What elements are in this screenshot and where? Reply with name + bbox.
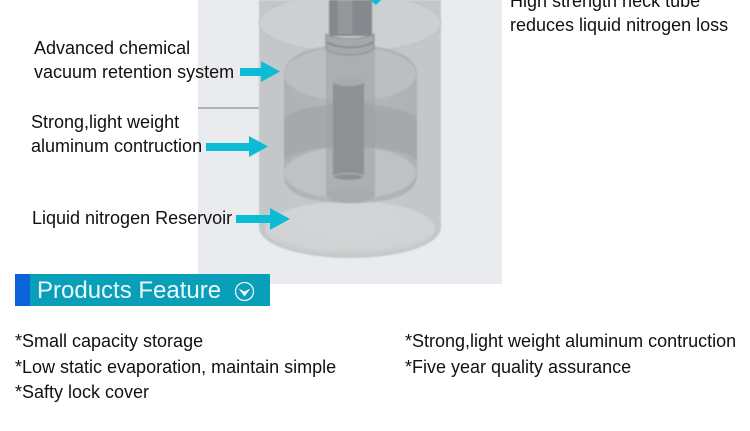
text: neck tube label: reduces liquid nitrogen loss bbox=[510, 15, 728, 35]
icon: inner vessel bbox=[284, 45, 417, 203]
text: aluminum label: aluminum contruction bbox=[31, 136, 202, 156]
text: aluminum label bbox=[31, 112, 202, 156]
text: features right column: *Five year quality assurance bbox=[405, 356, 631, 376]
arrow: aluminum construction bbox=[206, 136, 268, 157]
text: vacuum retention label bbox=[34, 38, 234, 82]
text: reservoir label: Liquid nitrogen Reservoir bbox=[32, 208, 232, 228]
icon: outer bottle bbox=[259, 0, 441, 258]
text: features left column bbox=[15, 331, 336, 402]
icon: chevron circle bbox=[234, 282, 254, 302]
icon: inner tube bbox=[326, 50, 375, 203]
arrow: reservoir bbox=[236, 208, 290, 230]
text: aluminum label: Strong,light weight bbox=[31, 112, 179, 132]
text: vacuum retention label: Advanced chemical bbox=[34, 38, 190, 58]
icon: neck tube bbox=[326, 0, 374, 55]
text: features left column: *Small capacity storage bbox=[15, 331, 203, 351]
text: features left column: *Low static evaporation, maintain simple bbox=[15, 356, 336, 376]
text: features left column: *Safty lock cover bbox=[15, 382, 149, 402]
text: vacuum retention label: vacuum retention system bbox=[34, 62, 234, 82]
arrow: neck tube bbox=[370, 0, 381, 5]
text: features right column bbox=[405, 331, 736, 377]
heading: products feature: Products Feature bbox=[37, 277, 221, 304]
arrow: vacuum system bbox=[240, 61, 280, 82]
heading: products feature bbox=[15, 274, 270, 306]
text: neck tube label bbox=[510, 0, 728, 35]
text: features right column: *Strong,light weight aluminum contruction bbox=[405, 331, 736, 351]
